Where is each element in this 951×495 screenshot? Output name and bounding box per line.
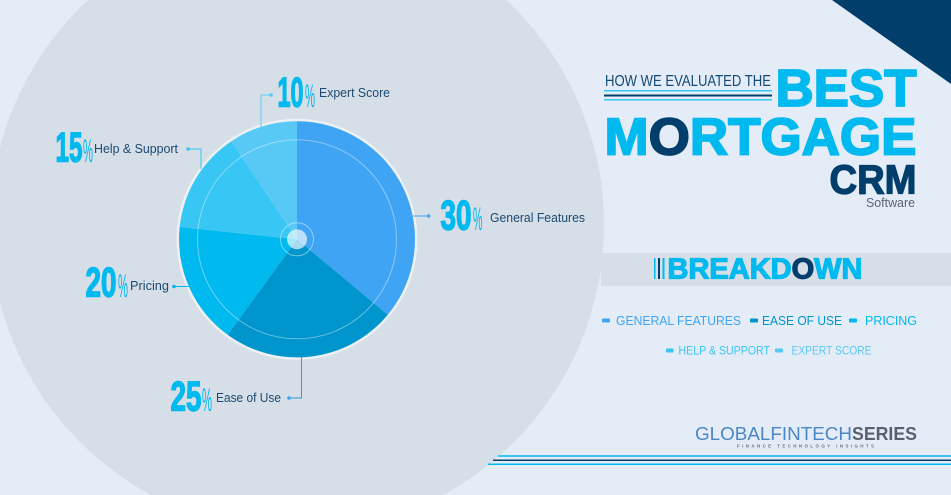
title: Software: Software xyxy=(866,196,915,210)
callout: expert score: % xyxy=(305,78,315,114)
title: intro line: HOW WE EVALUATED THE xyxy=(605,73,771,90)
callout: expert score: Expert Score xyxy=(319,85,390,100)
callout: general features: 30 xyxy=(440,192,472,238)
callout: ease of use: Ease of Use xyxy=(216,390,281,405)
slice: expert score 10% xyxy=(231,121,297,239)
title: MORTGAGE: MORTGAGE xyxy=(604,108,916,166)
legend: ease of use: EASE OF USE xyxy=(762,313,842,328)
bottom rules xyxy=(488,455,951,465)
title block xyxy=(604,60,917,210)
corner triangle xyxy=(832,0,951,84)
breakdown band xyxy=(601,253,951,286)
inner ring xyxy=(198,140,396,339)
slice: general features 30% xyxy=(297,121,415,315)
logo: global fintech series: SERIES xyxy=(852,424,917,444)
legend: pricing: PRICING xyxy=(865,313,917,328)
callout: expert score xyxy=(261,68,390,127)
title: CRM: CRM xyxy=(830,156,916,202)
pie chart xyxy=(176,119,418,360)
hub ring xyxy=(280,223,314,256)
legend xyxy=(602,313,917,358)
callout: general features: General Features xyxy=(490,210,585,225)
slice: help and support 15% xyxy=(180,141,297,239)
logo: global fintech series xyxy=(695,424,917,448)
legend: general features: GENERAL FEATURES xyxy=(616,313,741,328)
title: BEST: BEST xyxy=(776,60,917,118)
callout: help and support xyxy=(56,124,201,170)
callout: expert score: 10 xyxy=(278,68,304,116)
callout: general features: % xyxy=(473,201,482,237)
legend: help and support: HELP & SUPPORT xyxy=(678,346,770,358)
legend: expert score: EXPERT SCORE xyxy=(792,346,872,358)
callout: pricing: % xyxy=(118,268,128,304)
callout: pricing xyxy=(86,258,190,306)
callout: help and support: 15 xyxy=(56,124,82,170)
hub xyxy=(287,229,307,249)
breakdown heading: BREAKDOWN xyxy=(668,253,862,285)
slice: pricing 20% xyxy=(179,227,297,335)
logo: global fintech series: GLOBALFINTECH xyxy=(695,424,852,444)
callout: help and support: Help & Support xyxy=(94,141,178,156)
callout: ease of use: % xyxy=(202,382,212,418)
callout: help and support: % xyxy=(83,133,93,169)
callout: ease of use xyxy=(170,357,302,420)
slice: ease of use 25% xyxy=(228,239,388,357)
title: intro rules xyxy=(604,90,772,100)
callout: general features xyxy=(413,192,585,238)
logo: global fintech series: FINANCE TECHNOLOGY INSIGHTS xyxy=(737,444,874,448)
callout: ease of use: 25 xyxy=(170,372,202,420)
callout: pricing: 20 xyxy=(86,258,116,306)
background circle xyxy=(0,0,604,495)
callout: pricing: Pricing xyxy=(130,278,169,293)
